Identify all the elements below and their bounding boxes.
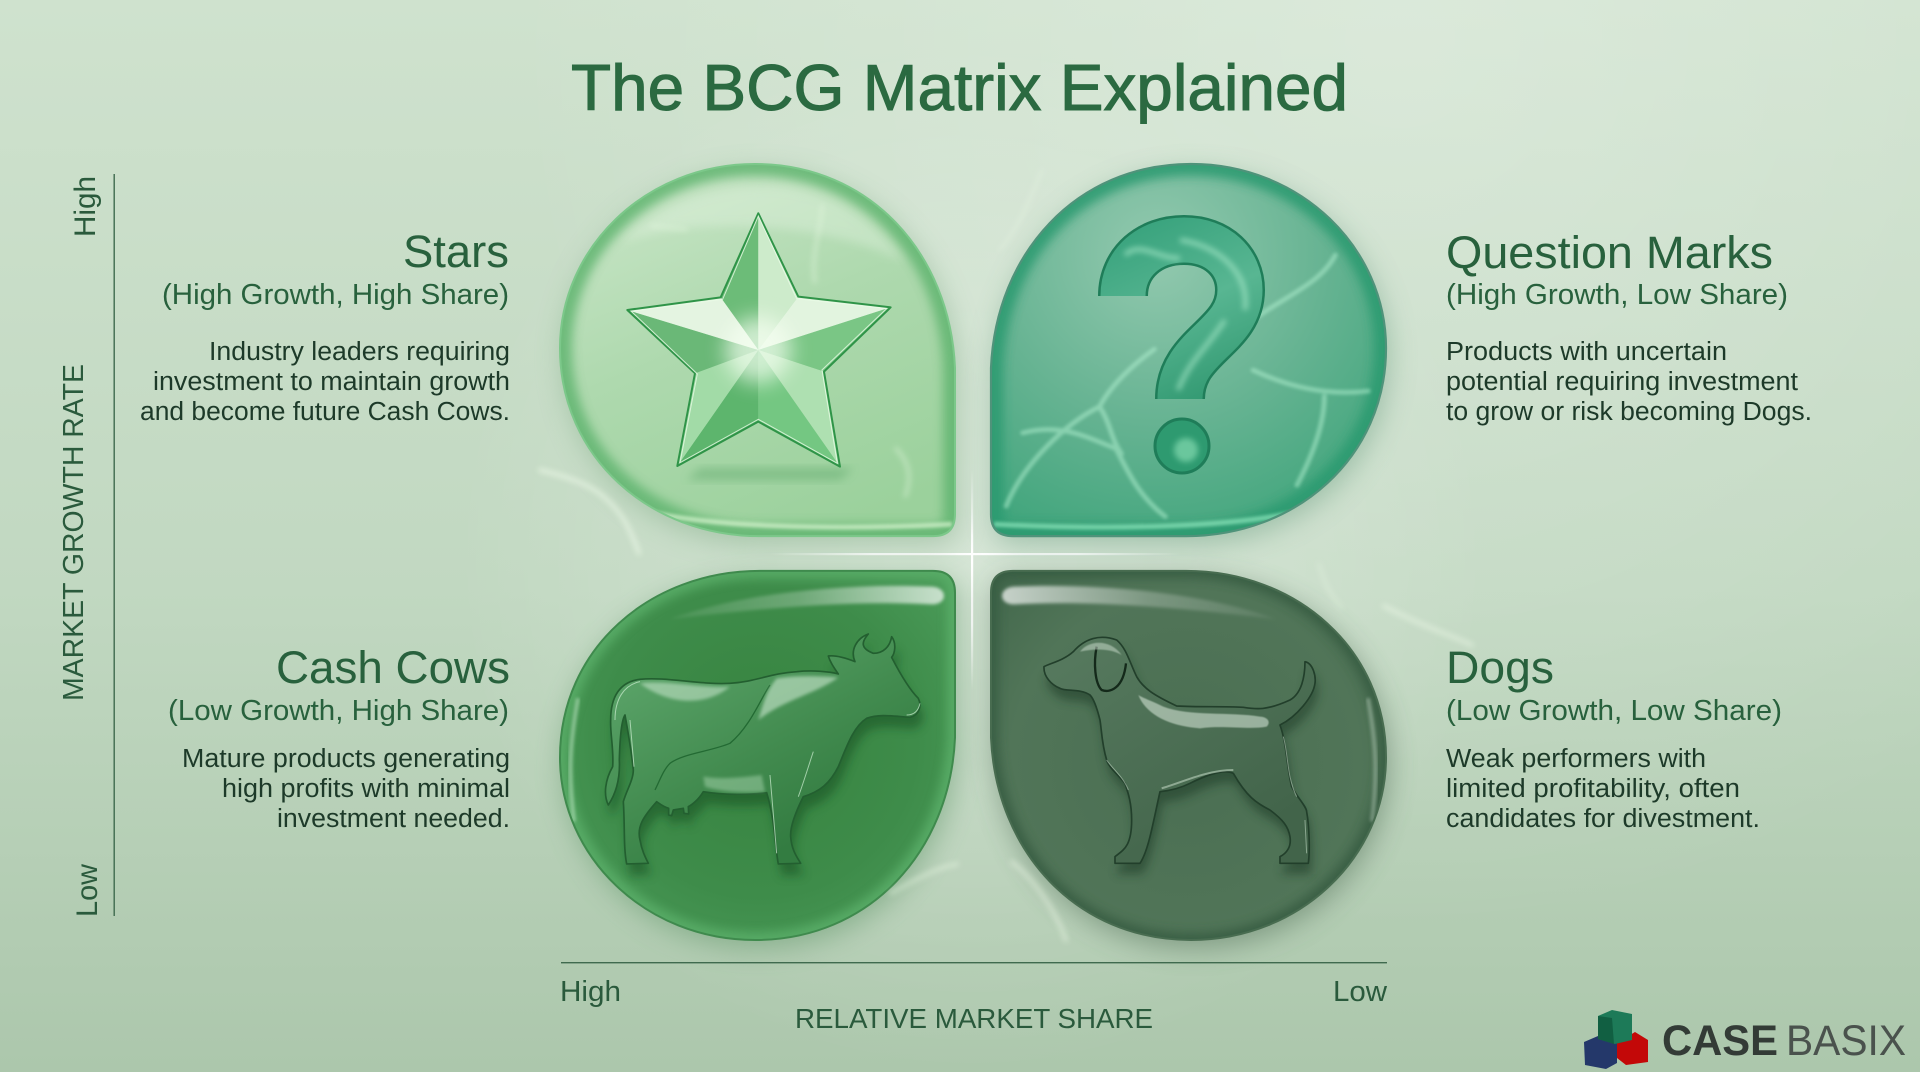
sub-heading: (Low Growth, High Share) [168, 695, 509, 727]
axis line: market share [561, 962, 1387, 963]
glow streaks over the quadrants [540, 170, 1472, 940]
text: Dogs [1446, 642, 1782, 833]
heading: Stars [403, 226, 509, 277]
description: high profits with minimal [222, 775, 510, 803]
description: Mature products generating [182, 745, 510, 773]
heading: Dogs [1446, 642, 1554, 693]
heading: Cash Cows [276, 642, 510, 693]
text: Question Marks [1446, 227, 1812, 426]
wordmark: CASE [1662, 1017, 1778, 1065]
description [1446, 745, 1760, 833]
description [1446, 338, 1812, 426]
icon: cubes [1584, 1010, 1648, 1069]
quadrant: Question Marks [991, 164, 1389, 544]
icon: dog [1044, 637, 1318, 874]
sub-heading: (Low Growth, Low Share) [1446, 695, 1782, 727]
logo: CaseBasix: BASIX [1786, 1017, 1906, 1065]
description: potential requiring investment [1446, 368, 1798, 396]
quadrant: Dogs [991, 571, 1389, 948]
description: investment needed. [277, 805, 510, 833]
icon: star [627, 213, 891, 480]
heading: Question Marks [1446, 227, 1773, 278]
label: Relative market share: RELATIVE MARKET SHARE [795, 1003, 1153, 1034]
description [182, 745, 510, 833]
title: The BCG Matrix Explained [571, 51, 1348, 124]
glass drop: Dogs [991, 571, 1389, 948]
description: Industry leaders requiring [209, 338, 510, 366]
quadrant: Cash Cows [560, 571, 958, 948]
label: Market growth rate: MARKET GROWTH RATE [58, 364, 90, 701]
text: Cash Cows [168, 642, 510, 833]
axis line: market growth [114, 174, 115, 916]
description: investment to maintain growth [153, 368, 510, 396]
quadrant: Stars [560, 164, 958, 544]
axis cross [770, 470, 1180, 690]
glass drop: Stars [560, 164, 958, 544]
icon: cow [605, 634, 923, 876]
text: Stars [140, 226, 510, 426]
Y axis [58, 174, 115, 917]
glass drop: Question Marks [991, 164, 1389, 544]
icon: question mark [1123, 240, 1245, 473]
sub-heading: (High Growth, High Share) [162, 279, 509, 311]
X axis [560, 962, 1388, 1034]
label: High share: High [560, 976, 621, 1008]
description: and become future Cash Cows. [140, 398, 510, 426]
description: limited profitability, often [1446, 775, 1740, 803]
label: High growth: High [69, 176, 102, 237]
caustic light lines [1006, 255, 1368, 517]
label: Low share: Low [1333, 976, 1388, 1008]
description [140, 338, 510, 426]
description: Weak performers with [1446, 745, 1706, 773]
label: Low growth: Low [71, 864, 104, 917]
glass drop: Cash Cows [560, 571, 958, 948]
logo: CaseBasix [1584, 1010, 1906, 1069]
description: candidates for divestment. [1446, 805, 1760, 833]
description: to grow or risk becoming Dogs. [1446, 398, 1812, 426]
sub-heading: (High Growth, Low Share) [1446, 279, 1788, 311]
description: Products with uncertain [1446, 338, 1727, 366]
